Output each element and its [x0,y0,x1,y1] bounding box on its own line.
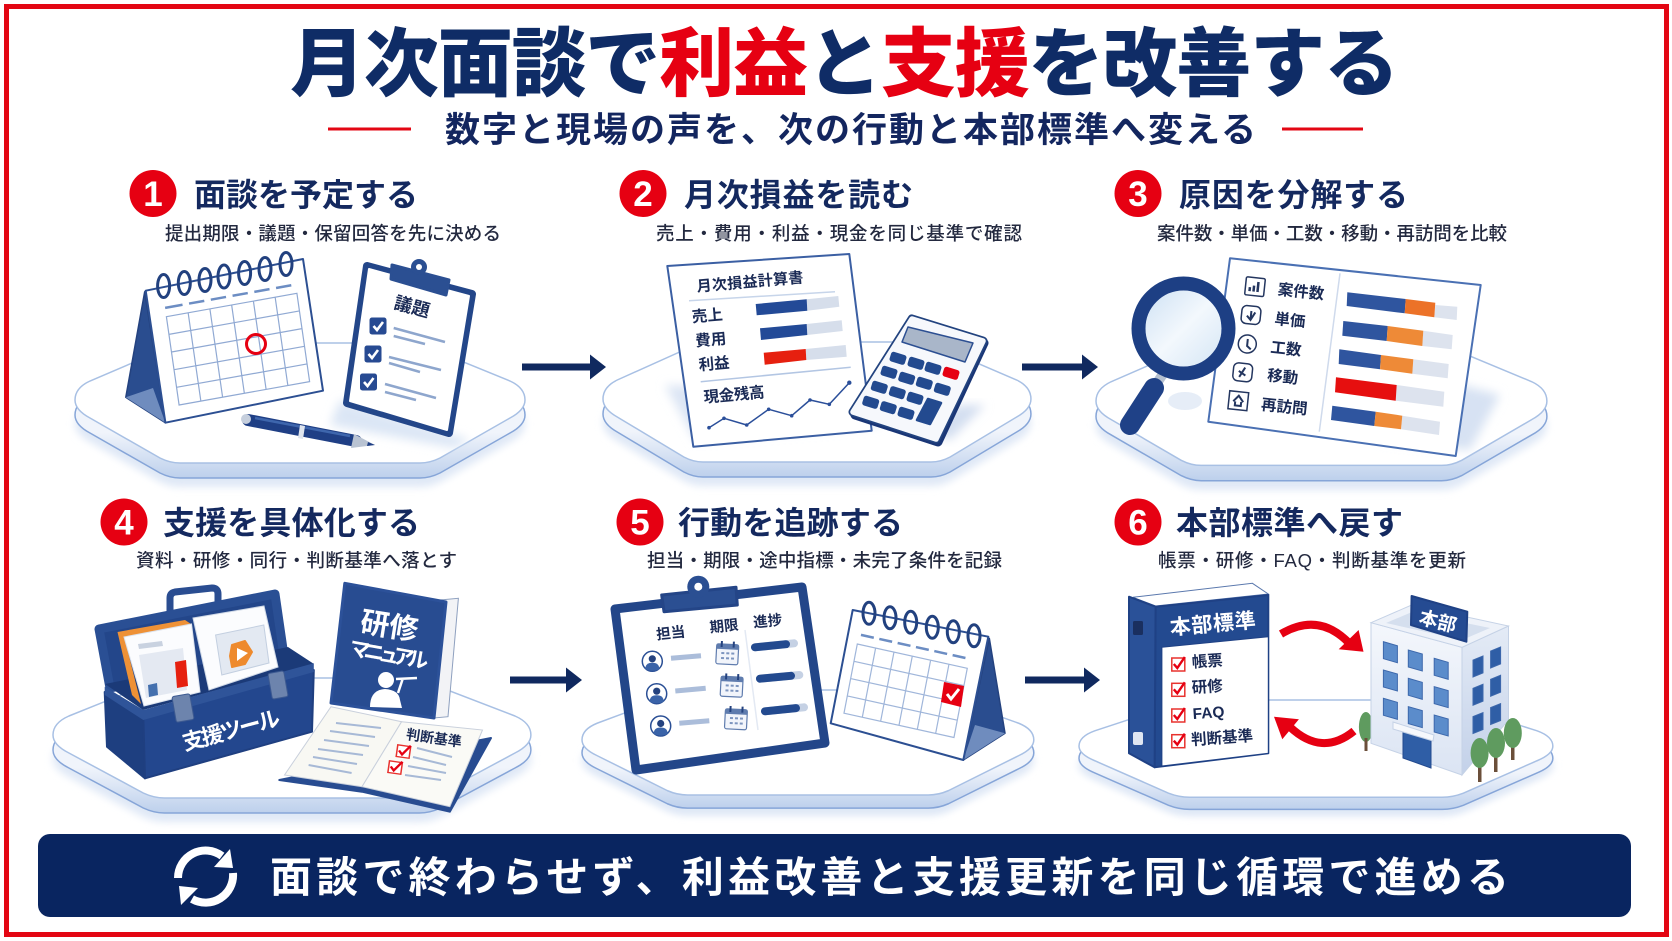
banner message: 面談で終わらせず、利益改善と支援更新を同じ循環で進める [270,854,1509,901]
P&L statement sheet: 利益 [698,354,731,374]
icon: HQ standards binder [1129,583,1268,767]
bar chart: sales, costs, profit [756,296,847,365]
platform 2 [603,342,1031,486]
factor labels [1260,281,1326,418]
progress bars [755,643,804,711]
step 4 heading: 支援を具体化する [163,505,420,541]
step 4 number badge: 4 [114,504,134,542]
binder checklist: FAQ [1192,704,1225,723]
P&L statement sheet: 費用 [695,330,727,350]
platform 3 [1096,343,1547,490]
icon: magnifying glass [1130,284,1228,425]
step 6: feed back into HQ standards [1079,498,1553,817]
icon: open criteria book [279,707,491,812]
step 6 description: 帳票・研修・FAQ・判断基準を更新 [1158,550,1466,571]
icon: refresh cycle arrows [178,849,233,905]
platform 6 [1079,700,1553,817]
step 5 heading: 行動を追跡する [678,505,903,541]
arrow: HQ to binder [1274,717,1354,743]
column headings: 進捗 [752,612,783,631]
column headings: 担当 [655,623,686,643]
P&L statement sheet [665,254,880,447]
factor mini icons [1228,277,1265,411]
step 3 number badge: 3 [1128,175,1148,214]
step 2 heading: 月次損益を読む [684,177,913,213]
icon: support toolbox: 支援ツール [180,705,283,755]
step 2: read the monthly P&L [603,170,1031,486]
step 3 number badge [1114,170,1162,217]
binder checklist: 判断基準 [1190,726,1254,749]
subtitle with red rules: 数字と現場の声を、次の行動と本部標準へ変える [445,111,1256,150]
P&L statement sheet: 売上 [691,306,724,326]
step 1 heading: 面談を予定する [194,177,418,213]
platform 5 [582,690,1034,816]
icon: pen [241,414,375,448]
binder checklist: 研修 [1191,677,1224,697]
icon: agenda clipboard [347,259,472,433]
factor labels: 移動 [1266,366,1299,388]
P&L statement sheet: 現金残高 [703,382,765,407]
arrow: step 1 to 2 [522,354,606,380]
step 4: make support concrete [53,498,531,822]
column headings [655,612,783,643]
step 5 number badge [616,498,664,546]
icon: calculator [853,319,985,442]
step 5 number badge: 5 [630,504,650,542]
line chart: cash balance [707,380,852,430]
HQ sign: 本部 [1417,607,1459,637]
factor comparison card [1208,258,1500,456]
bottom banner [38,834,1631,917]
icon: desk calendar [126,252,470,448]
icon: head office building [1359,596,1522,782]
icon: HQ standards binder: 本部標準 [1169,609,1257,640]
step 6 number badge: 6 [1128,504,1148,542]
step 3: break down causes [1096,170,1547,490]
tracking clipboard [615,576,825,770]
stacked bar chart [1331,292,1457,435]
column headings: 期限 [709,616,740,636]
step 6 number badge [1114,498,1162,546]
step 4 number badge [100,498,148,546]
P&L statement sheet: 月次損益計算書 [696,268,804,296]
step 3 heading: 原因を分解する [1179,177,1408,213]
step 2 number badge [620,170,666,217]
step 4 description: 資料・研修・同行・判断基準へ落とす [136,550,457,571]
icon: agenda clipboard: 議題 [392,293,432,321]
icon: training manual [331,583,458,718]
assignee rows [642,641,748,736]
step 5 description: 担当・期限・途中指標・未完了条件を記録 [647,550,1002,571]
arrow: step 4 to 5 [510,668,582,692]
icon: training manual: マニュアル [347,637,430,674]
arrow: step 5 to 6 [1025,668,1100,692]
icon: calendar with checked date [831,602,1005,760]
platform 1 [75,343,525,487]
title: 月次面談で利益と支援を改善する [290,22,1399,106]
icon: support toolbox [99,588,314,778]
step 3 description: 案件数・単価・工数・移動・再訪問を比較 [1157,223,1507,244]
toolbox documents [118,606,278,706]
binder checklist: 帳票 [1191,650,1223,672]
icon: training manual: 研修 [358,606,420,647]
step 1 number badge [130,170,176,217]
step 1: schedule the interview [75,170,525,487]
icon: open criteria book: 判断基準 [405,726,463,750]
step 2 number badge: 2 [633,175,653,214]
trees [1471,718,1522,782]
arrow: step 2 to 3 [1022,354,1098,380]
step 1 number badge: 1 [143,175,163,214]
factor labels: 案件数 [1277,281,1326,303]
step 5: track actions [582,498,1034,816]
HQ sign [1411,596,1467,642]
step 2 description: 売上・費用・利益・現金を同じ基準で確認 [656,223,1022,244]
platform 4 [53,678,531,822]
arrow: binder to HQ [1281,625,1364,652]
binder checklist [1172,650,1254,749]
factor labels: 工数 [1270,338,1303,360]
step 1 description: 提出期限・議題・保留回答を先に決める [165,223,501,244]
step 6 heading: 本部標準へ戻す [1176,505,1403,541]
factor labels: 再訪問 [1260,396,1308,418]
factor labels: 単価 [1274,309,1306,331]
